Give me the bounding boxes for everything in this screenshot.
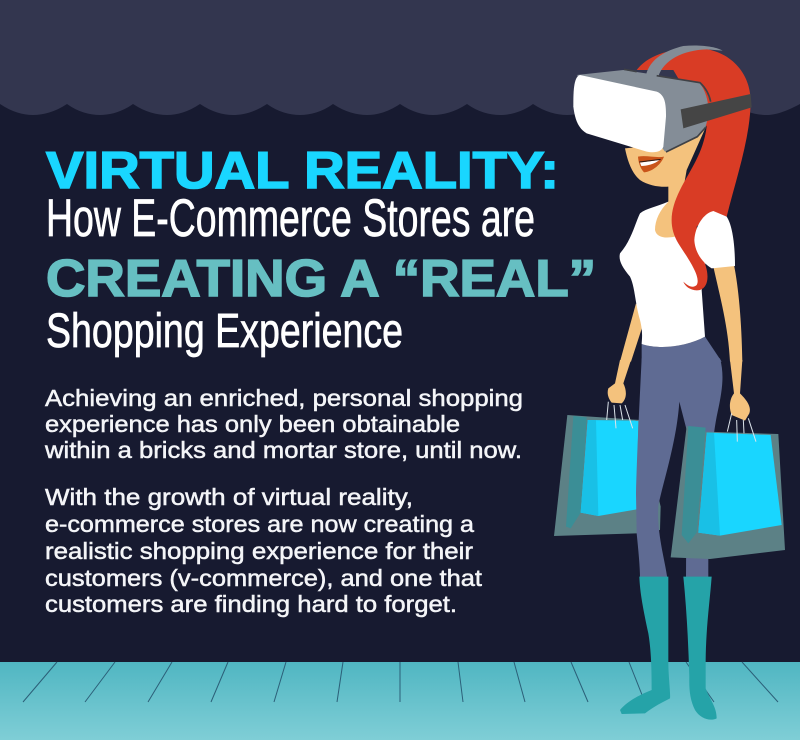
shirt: [620, 202, 707, 347]
intro paragraph: experience has only been obtainable: [45, 411, 460, 437]
second paragraph: customers (v-commerce), and one that: [45, 565, 483, 591]
upper body and head: [573, 45, 752, 362]
second paragraph: e-commerce stores are now creating a: [45, 511, 474, 537]
second paragraph: [45, 484, 483, 617]
headset body: [577, 70, 708, 152]
headset white visor: [573, 75, 666, 152]
intro paragraph: within a bricks and mortar store, until now.: [44, 437, 522, 463]
face and neck: [625, 127, 706, 238]
title line: Creating a Real: CREATING A “REAL”: [46, 250, 596, 308]
floor: [0, 662, 800, 740]
intro paragraph: [44, 385, 523, 463]
right arm and hand: [730, 360, 750, 421]
second paragraph: With the growth of virtual reality,: [45, 484, 413, 510]
sleeve: [694, 211, 735, 268]
second paragraph: realistic shopping experience for their: [45, 538, 473, 564]
icon: left shopping bag: [554, 415, 661, 536]
lower body and shopping bags: [554, 358, 785, 720]
left arm and hand: [608, 360, 631, 403]
second paragraph: customers are finding hard to forget.: [45, 591, 457, 617]
title: [46, 142, 596, 358]
left boot: [620, 577, 670, 714]
right boot: [683, 577, 717, 720]
title line: Virtual Reality: VIRTUAL REALITY:: [46, 142, 559, 200]
left upper arm: [620, 303, 644, 362]
leggings: [636, 358, 722, 578]
title line: How E-Commerce Stores are: How E-Commerce Stores are: [46, 189, 535, 248]
headset side strap: [681, 94, 752, 128]
scalloped top curtain: [0, 0, 800, 115]
title line: Shopping Experience: Shopping Experience: [46, 305, 403, 358]
icon: right shopping bag: [671, 426, 785, 559]
icon: mouth: [638, 156, 664, 172]
icon: VR headset: [573, 45, 752, 152]
bag handles: [607, 402, 756, 442]
intro paragraph: Achieving an enriched, personal shopping: [45, 385, 523, 411]
leggings waist: [642, 337, 722, 362]
woman figure: [554, 45, 785, 720]
red hair: [637, 48, 751, 290]
headset head strap: [646, 45, 723, 77]
right upper arm: [713, 265, 742, 362]
